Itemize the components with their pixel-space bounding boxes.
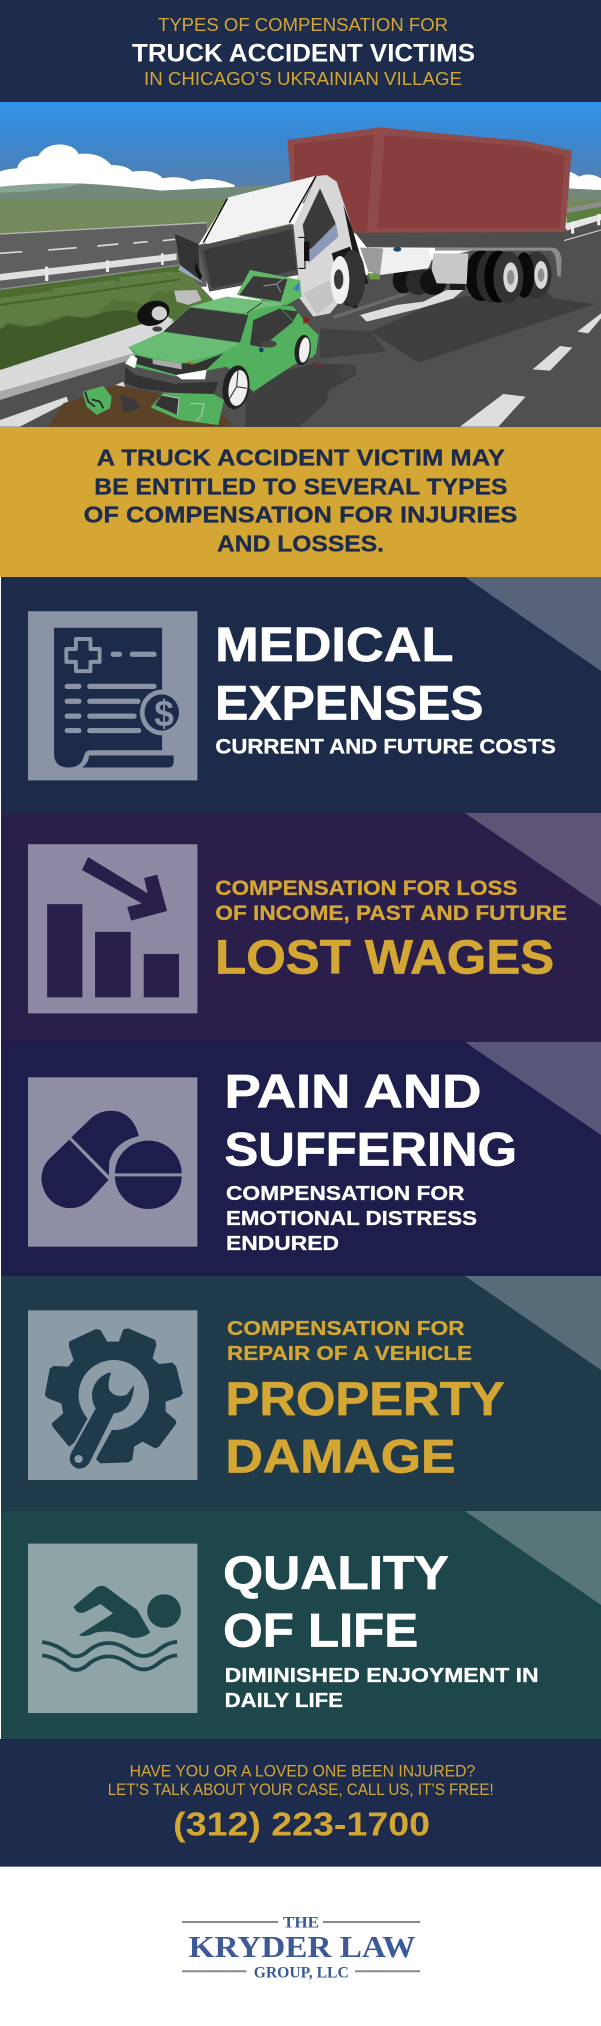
illustration: truck and car crash on highway xyxy=(0,102,601,427)
debris stripes and mud patch xyxy=(0,382,233,427)
car wreck xyxy=(83,270,323,425)
truck xyxy=(175,127,572,317)
icon: medical bill xyxy=(28,611,197,780)
intro text: OF COMPENSATION FOR INJURIES xyxy=(84,502,517,528)
heading: EXPENSES xyxy=(215,677,483,730)
car wheels xyxy=(220,334,323,411)
subheading: COMPENSATION FOR LOSS xyxy=(215,877,518,900)
logo: The Kryder Law Group: GROUP, LLC xyxy=(254,1964,349,1981)
subheading: COMPENSATION FOR xyxy=(226,1182,465,1205)
subheading: OF INCOME, PAST AND FUTURE xyxy=(215,902,567,925)
heading: LOST WAGES xyxy=(215,932,554,985)
fuel tank and chassis xyxy=(360,247,468,284)
call to action text: HAVE YOU OR A LOVED ONE BEEN INJURED? xyxy=(130,1761,475,1780)
subheading: REPAIR OF A VEHICLE xyxy=(227,1342,472,1365)
detached truck panel and wheel xyxy=(134,290,202,330)
heading xyxy=(226,1372,504,1483)
call to action band xyxy=(0,1739,601,1867)
subheading xyxy=(227,1317,472,1365)
subheading xyxy=(226,1182,477,1255)
logo: The Kryder Law Group: KRYDER LAW xyxy=(189,1929,416,1964)
lane markings, shadows and mud xyxy=(320,230,601,427)
heading xyxy=(224,1064,517,1176)
logo: The Kryder Law Group xyxy=(182,1915,420,1981)
heading: MEDICAL xyxy=(215,619,454,672)
icon: gear and wrench xyxy=(28,1310,197,1480)
panel: quality of life xyxy=(1,1511,601,1739)
icon: falling bar chart xyxy=(28,844,197,1013)
panel: pain and suffering xyxy=(1,1042,601,1276)
car body xyxy=(125,297,318,395)
subheading: EMOTIONAL DISTRESS xyxy=(226,1207,477,1230)
call to action text: LET’S TALK ABOUT YOUR CASE, CALL US, IT’S FREE! xyxy=(108,1780,494,1799)
truck container xyxy=(287,127,572,248)
raised trunk lid xyxy=(237,270,302,305)
heading: PROPERTY xyxy=(226,1372,504,1425)
logo: The Kryder Law Group: THE xyxy=(283,1915,319,1932)
mudguard xyxy=(435,248,562,277)
intro text: A TRUCK ACCIDENT VICTIM MAY xyxy=(97,444,505,470)
subheading: ENDURED xyxy=(226,1232,339,1255)
intro text: AND LOSSES. xyxy=(217,530,384,556)
heading: QUALITY xyxy=(223,1546,449,1599)
subheading xyxy=(215,877,567,925)
heading: PAIN AND xyxy=(224,1064,482,1117)
title line 2: TRUCK ACCIDENT VICTIMS xyxy=(132,41,475,68)
panel: property damage xyxy=(1,1276,601,1511)
icon: medical bill: $ xyxy=(154,692,174,734)
heading xyxy=(215,619,483,730)
heading: DAMAGE xyxy=(226,1430,456,1483)
icon: swimmer xyxy=(28,1544,197,1713)
panel: medical expenses xyxy=(1,577,601,813)
phone number: (312) 223-1700 xyxy=(173,1806,430,1842)
heading: OF LIFE xyxy=(223,1604,418,1657)
sky and hills xyxy=(0,102,601,236)
subheading xyxy=(225,1664,539,1712)
title line 1: TYPES OF COMPENSATION FOR xyxy=(158,14,448,35)
subheading: DAILY LIFE xyxy=(225,1689,343,1712)
heading: SUFFERING xyxy=(224,1123,517,1176)
rear axle wheels xyxy=(393,250,552,303)
intro text: BE ENTITLED TO SEVERAL TYPES xyxy=(94,473,508,499)
intro text xyxy=(84,444,517,556)
header banner xyxy=(0,0,601,102)
call to action text xyxy=(108,1761,494,1799)
icon: pills xyxy=(28,1077,197,1247)
cab xyxy=(175,175,368,317)
subheading: CURRENT AND FUTURE COSTS xyxy=(215,736,556,758)
subheading: COMPENSATION FOR xyxy=(227,1317,465,1340)
intro banner xyxy=(0,427,601,577)
heading xyxy=(223,1546,449,1657)
broken bumper and debris xyxy=(83,386,224,425)
panel: lost wages xyxy=(1,813,601,1042)
subheading: DIMINISHED ENJOYMENT IN xyxy=(225,1664,539,1687)
title line 3: IN CHICAGO’S UKRAINIAN VILLAGE xyxy=(144,68,462,89)
road surface xyxy=(0,202,601,427)
road, rail, grass and barrier on the left xyxy=(0,223,213,392)
